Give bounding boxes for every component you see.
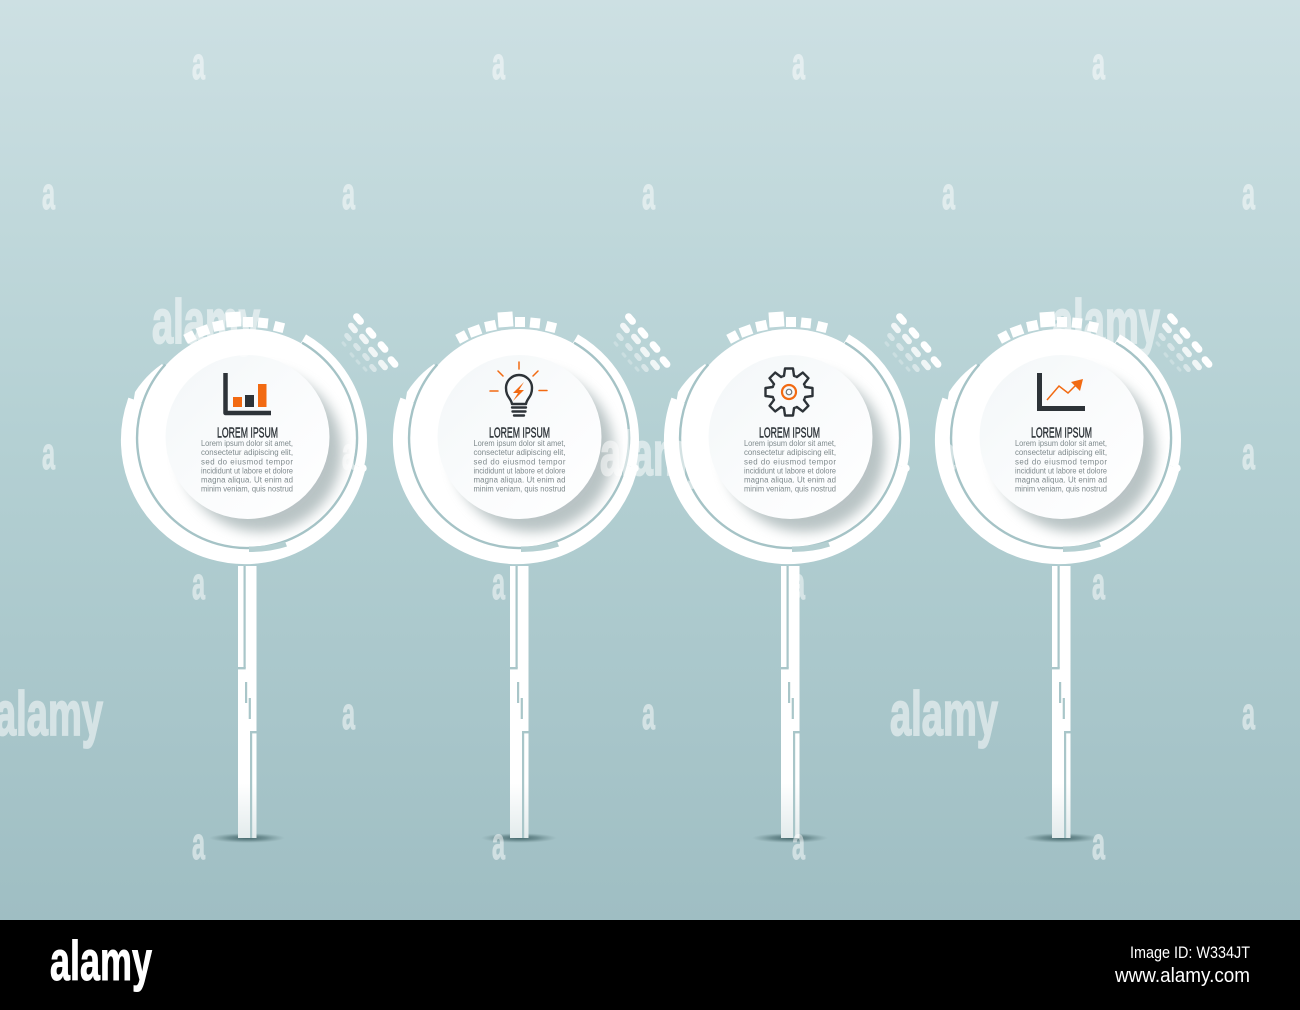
watermark pattern: a [342, 428, 356, 479]
body text [1015, 439, 1108, 494]
body text: minim veniam, quis nostrud [201, 484, 293, 494]
body text: incididunt ut labore et dolore [201, 466, 294, 476]
outer rings and disc [402, 329, 639, 555]
stem [1023, 566, 1099, 843]
watermark pattern: a [492, 818, 506, 869]
body text: Lorem ipsum dolor sit amet, [474, 439, 566, 448]
body text: incididunt ut labore et dolore [1015, 466, 1108, 476]
body text: minim veniam, quis nostrud [474, 484, 566, 494]
watermark pattern: a [342, 688, 356, 739]
watermark pattern: a [192, 38, 206, 89]
watermark pattern: a [42, 428, 56, 479]
watermark pattern: a [642, 168, 656, 219]
watermark pattern: a [792, 38, 806, 89]
heading: LOREM IPSUM [217, 424, 278, 442]
watermark pattern: a [1092, 818, 1106, 869]
heading: LOREM IPSUM [1031, 424, 1092, 442]
watermark pattern: alamy [152, 288, 260, 357]
body text: magna aliqua. Ut enim ad [1015, 476, 1107, 484]
watermark pattern: a [1242, 168, 1256, 219]
icon: light bulb [490, 362, 547, 416]
body text: sed do eiusmod tempor [744, 458, 836, 466]
heading: LOREM IPSUM [759, 424, 820, 442]
body text: consectetur adipiscing elit, [201, 448, 293, 457]
icon: gear [766, 368, 812, 416]
tick squares [455, 311, 557, 344]
watermark pattern: a [792, 818, 806, 869]
watermark pattern: a [942, 168, 956, 219]
step 3: gear [673, 311, 943, 843]
icon: growth chart [1040, 373, 1085, 408]
body text [474, 439, 566, 494]
outer rings and disc [944, 329, 1181, 555]
watermark pattern: alamy [0, 680, 103, 749]
watermark pattern: a [1092, 38, 1106, 89]
watermark pattern: a [1242, 688, 1256, 739]
heading: LOREM IPSUM [489, 424, 550, 442]
watermark pattern [0, 38, 1256, 869]
inner disc [438, 355, 614, 532]
body text: consectetur adipiscing elit, [744, 448, 836, 457]
watermark pattern: alamy [890, 680, 998, 749]
body text: incididunt ut labore et dolore [474, 466, 566, 476]
image id: Image ID: W334JT [1130, 943, 1250, 962]
body text: consectetur adipiscing elit, [474, 448, 566, 457]
watermark pattern: a [1092, 558, 1106, 609]
body text: consectetur adipiscing elit, [1015, 448, 1107, 457]
dot pattern [1155, 312, 1214, 373]
dot pattern [341, 312, 400, 373]
body text: minim veniam, quis nostrud [744, 484, 836, 494]
inner disc [980, 355, 1156, 532]
stem [481, 566, 557, 843]
inner disc [166, 355, 342, 532]
watermark pattern: a [492, 38, 506, 89]
watermark pattern: alamy [600, 420, 708, 489]
watermark pattern: a [1242, 428, 1256, 479]
stem [752, 566, 828, 843]
body text: Lorem ipsum dolor sit amet, [1015, 439, 1107, 448]
watermark pattern: a [342, 168, 356, 219]
body text [201, 439, 294, 494]
body text: Lorem ipsum dolor sit amet, [744, 439, 836, 448]
body text: magna aliqua. Ut enim ad [744, 476, 836, 484]
dot pattern [613, 312, 672, 373]
body text: magna aliqua. Ut enim ad [474, 476, 566, 484]
dot pattern [884, 312, 943, 373]
tick squares [726, 311, 828, 344]
watermark pattern: a [642, 688, 656, 739]
tick squares [183, 311, 285, 344]
step 2: light bulb [402, 311, 672, 843]
body text: magna aliqua. Ut enim ad [201, 476, 293, 484]
watermark pattern: alamy [1052, 288, 1160, 357]
body text [744, 439, 837, 494]
footer logo: alamy [50, 929, 152, 992]
inner disc [708, 355, 885, 532]
body text: Lorem ipsum dolor sit amet, [201, 439, 293, 448]
step 4: growth chart [944, 311, 1214, 843]
step 1: bar chart [130, 311, 400, 843]
icon: bar chart [226, 373, 271, 413]
body text: sed do eiusmod tempor [201, 458, 293, 466]
outer rings and disc [130, 329, 367, 555]
footer bar [0, 920, 1300, 1010]
watermark pattern: a [192, 558, 206, 609]
tick squares [997, 311, 1099, 344]
website: www.alamy.com [1114, 965, 1250, 987]
watermark pattern: a [492, 558, 506, 609]
watermark pattern: a [942, 428, 956, 479]
outer rings and disc [673, 329, 910, 555]
watermark pattern: a [192, 818, 206, 869]
watermark pattern: a [792, 558, 806, 609]
body text: minim veniam, quis nostrud [1015, 484, 1107, 494]
body text: incididunt ut labore et dolore [744, 466, 837, 476]
body text: sed do eiusmod tempor [474, 458, 566, 466]
stem [209, 566, 285, 843]
body text: sed do eiusmod tempor [1015, 458, 1107, 466]
watermark pattern: a [42, 168, 56, 219]
